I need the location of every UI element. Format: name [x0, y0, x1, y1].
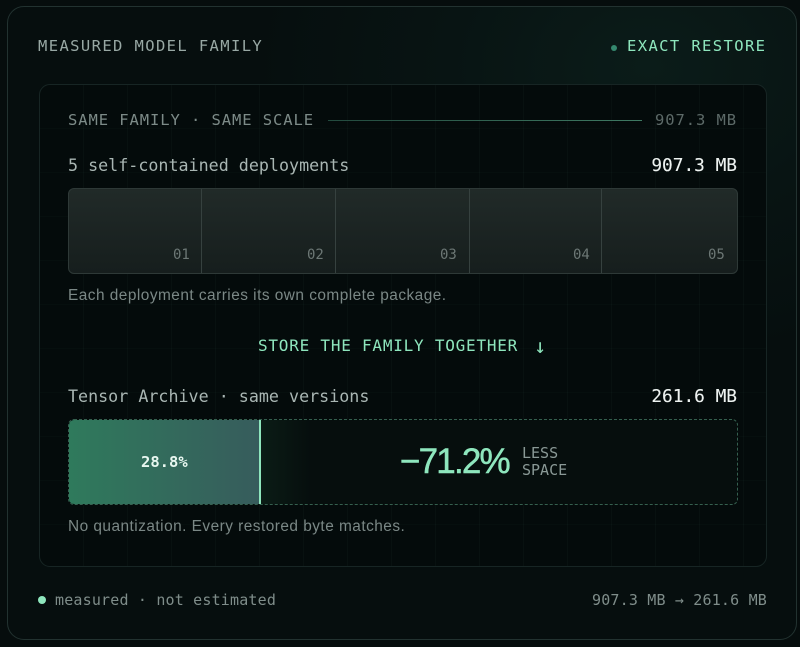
status badge: exact restore [611, 37, 766, 55]
row heading: tensor archive: Tensor Archive · same versions [68, 386, 369, 406]
bar: five deployments [68, 188, 738, 274]
panel: inner measurement card [39, 84, 767, 567]
scale value: 907.3 MB [655, 111, 737, 129]
savings caption [522, 444, 567, 479]
footer comparison: 907.3 MB → 261.6 MB [592, 591, 767, 609]
row heading: self-contained deployments: 5 self-contained deployments [68, 155, 349, 175]
savings caption: LESS [522, 444, 558, 462]
scale line [328, 120, 642, 121]
title: MEASURED MODEL FAMILY [38, 37, 263, 55]
row value: 261.6 MB: 261.6 MB [651, 386, 737, 407]
section label: same family same scale: SAME FAMILY · SAME SCALE [68, 111, 314, 129]
icon: status dot [611, 45, 617, 51]
segment label 03: 03 [440, 247, 457, 263]
segment label 04: 04 [573, 247, 590, 263]
note: each deployment: Each deployment carries its own complete package. [68, 287, 447, 304]
segment divider 1 [201, 189, 202, 273]
savings figure: −71.2% [400, 442, 509, 481]
fill label: 28.8% [141, 453, 188, 471]
fill edge glow [261, 420, 311, 504]
transition label: STORE THE FAMILY TOGETHER [258, 336, 518, 355]
badge label: EXACT RESTORE [627, 37, 766, 55]
segment label 02: 02 [307, 247, 324, 263]
bar: tensor archive [68, 419, 738, 505]
fill edge line [259, 420, 261, 504]
segment divider 4 [601, 189, 602, 273]
icon: legend dot [38, 596, 46, 604]
row value: 907.3 MB: 907.3 MB [651, 155, 737, 176]
segment divider 2 [335, 189, 336, 273]
segment divider 3 [469, 189, 470, 273]
note: no quantization: No quantization. Every restored byte matches. [68, 518, 405, 535]
segment label 05: 05 [708, 247, 725, 263]
segment label 01: 01 [173, 247, 190, 263]
savings caption: SPACE [522, 461, 567, 479]
archive fill 28.8% [69, 420, 259, 504]
legend text: measured · not estimated [55, 591, 276, 609]
icon: down arrow: ↓ [534, 334, 546, 358]
footer legend: measured [38, 591, 276, 609]
